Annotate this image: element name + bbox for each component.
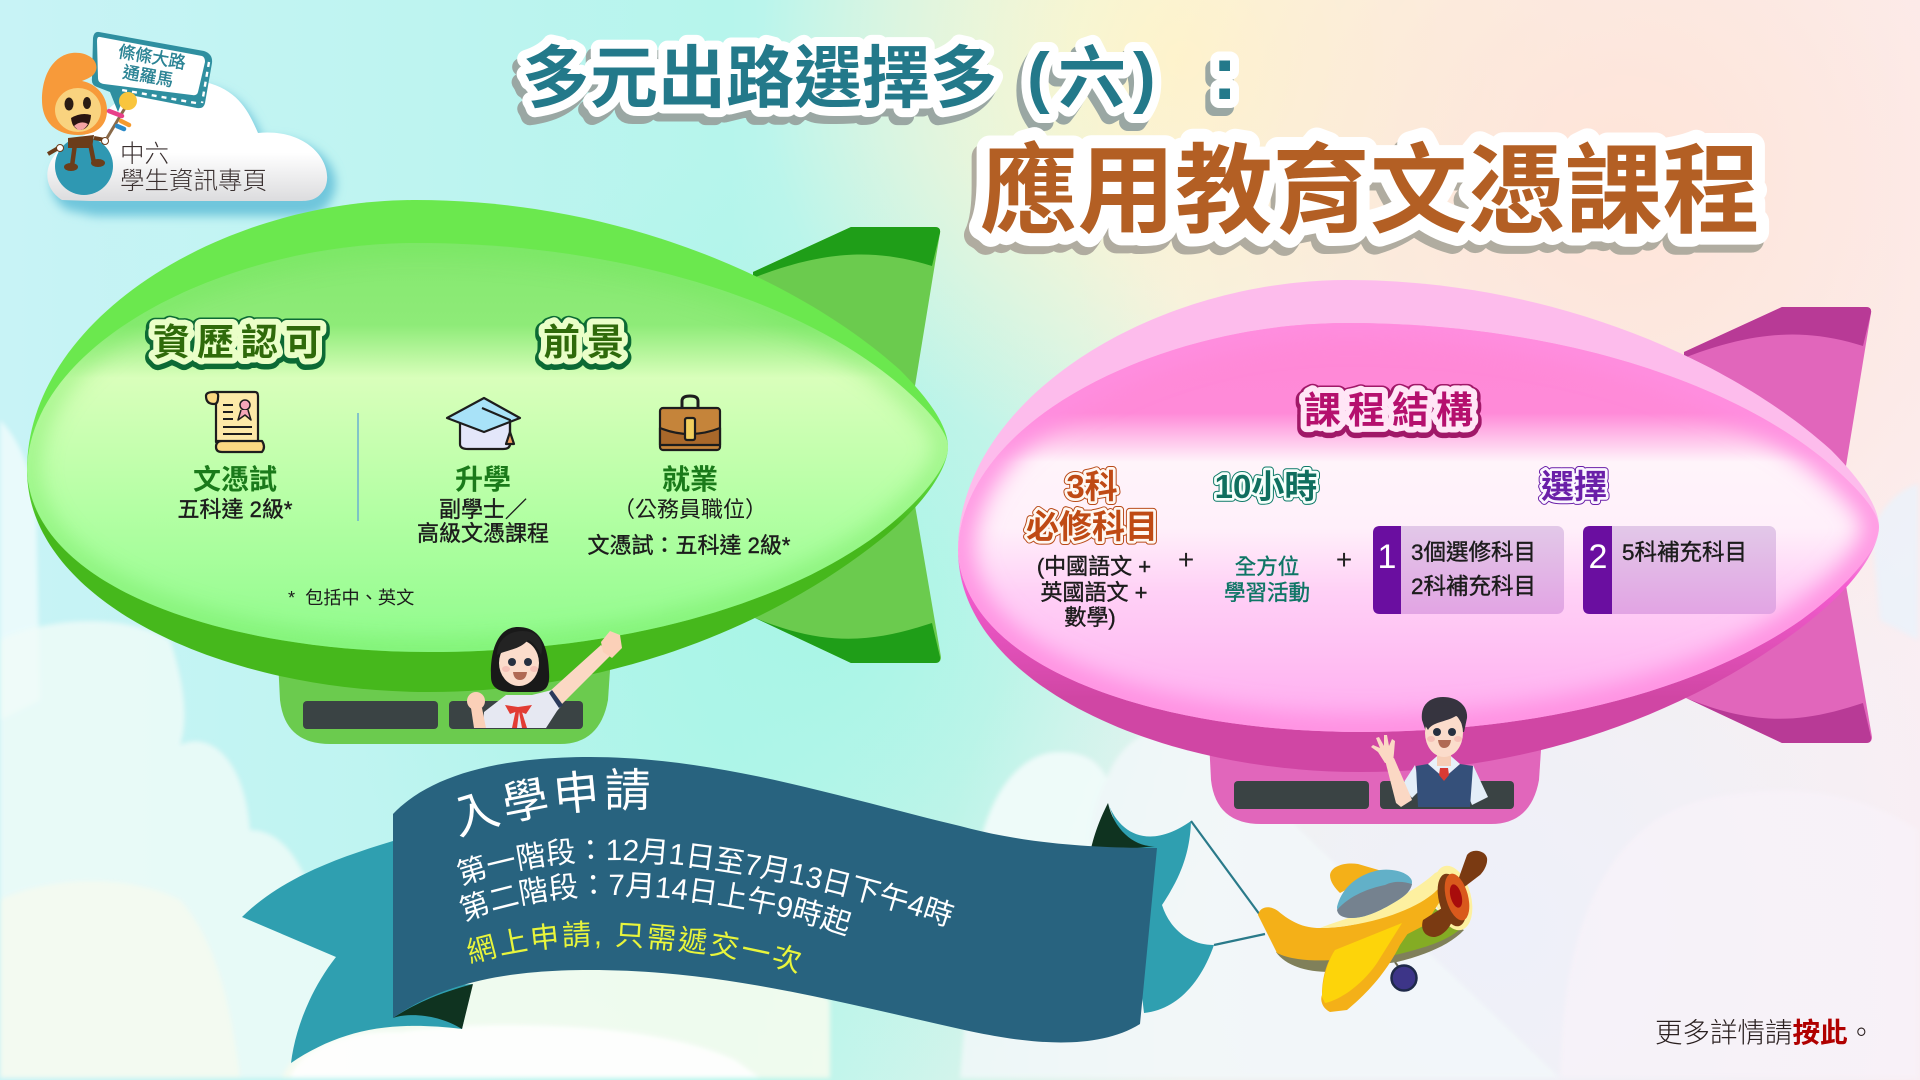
ribbon stage 2: 第二階段：7月14日上午9時起 xyxy=(459,872,852,936)
logo: student info page xyxy=(42,32,336,216)
title: line 1: ) xyxy=(1133,39,1156,115)
option box 1 xyxy=(1373,526,1564,614)
title: line 2: 應用教育文憑課程 xyxy=(975,145,1755,254)
title: line 1: 六 xyxy=(1058,41,1126,117)
speech bubble xyxy=(92,32,212,112)
ten hours activities: 10小時 xyxy=(1215,468,1317,505)
compulsory subjects: 3科 xyxy=(1066,468,1118,505)
plus sign 1: + xyxy=(1178,544,1194,575)
title: line 1: : xyxy=(1212,31,1237,116)
application ribbon xyxy=(242,757,1254,1063)
ribbon note: 網上申請, 只需遞交一次 xyxy=(467,920,802,974)
exam requirement xyxy=(178,464,293,522)
heading: qualification: 資歷認可 xyxy=(153,324,329,365)
ten hours activities xyxy=(1215,468,1317,605)
girl student xyxy=(467,627,622,728)
employment: 文憑試：五科達 2級* xyxy=(588,533,791,558)
compulsory subjects: 英國語文 + xyxy=(1041,580,1147,605)
title: line 1: 多元出路選擇多 xyxy=(522,41,998,117)
divider xyxy=(357,413,359,521)
ribbon heading: 入學申請 xyxy=(458,768,649,838)
exam requirement: 五科達 2級* xyxy=(178,497,293,522)
footnote: * 包括中、英文 xyxy=(288,588,414,608)
heading: qualification: 資歷認可 xyxy=(153,322,329,363)
title: line 1: 多元出路選擇多 xyxy=(522,41,998,117)
title: line 1: ) xyxy=(1133,39,1156,115)
icon: toy plane xyxy=(1258,851,1487,1012)
exam requirement: 文憑試 xyxy=(193,464,277,495)
ten hours activities: 學習活動 xyxy=(1224,581,1310,605)
pink envelope xyxy=(958,280,1879,772)
heading: prospects: 前景 xyxy=(543,322,631,363)
option box 2: 5科補充科目 xyxy=(1622,540,1747,565)
electives heading: 選擇 xyxy=(1541,468,1607,505)
further study: 高級文憑課程 xyxy=(417,521,549,546)
title: line 1: : xyxy=(1212,31,1237,116)
electives heading: 選擇 xyxy=(1541,468,1607,505)
plus sign 2: + xyxy=(1336,544,1352,575)
logo text: 中六 xyxy=(120,140,169,168)
title: line 1: 六 xyxy=(1058,41,1126,117)
employment: （公務員職位） xyxy=(613,497,767,522)
green airship xyxy=(27,200,948,744)
title: line 1 xyxy=(517,31,1237,125)
option box 2 xyxy=(1583,526,1776,614)
further study: 副學士／ xyxy=(439,497,527,522)
title: line 1: 多元出路選擇多 xyxy=(517,49,993,125)
title: line 1: ( xyxy=(1027,39,1050,115)
ribbon right tail xyxy=(1108,803,1214,1013)
heading: course structure: 課程結構 xyxy=(1304,390,1480,431)
option box 1: 2科補充科目 xyxy=(1411,574,1536,599)
compulsory subjects: 必修科目 xyxy=(1026,508,1158,545)
boy student xyxy=(1371,697,1488,807)
ten hours activities: 全方位 xyxy=(1235,555,1299,579)
icon: certificate scroll xyxy=(206,392,264,452)
logo cloud xyxy=(47,80,336,216)
pink fins xyxy=(1684,307,1872,743)
title: line 2: 應用教育文憑課程 xyxy=(980,137,1760,246)
ten hours activities: 10小時 xyxy=(1215,468,1317,505)
compulsory subjects: 必修科目 xyxy=(1026,508,1158,545)
further study xyxy=(417,464,549,546)
ribbon stage 1: 第一階段：12月1日至7月13日下午4時 xyxy=(456,838,954,926)
heading: prospects: 前景 xyxy=(543,322,631,363)
further study: 升學 xyxy=(455,464,511,495)
compulsory subjects: 數學) xyxy=(1064,605,1116,630)
green envelope xyxy=(27,200,948,692)
logo text: 學生資訊專頁 xyxy=(120,167,267,195)
title: line 1: 六 xyxy=(1053,49,1121,125)
pink airship xyxy=(958,280,1879,824)
compulsory subjects xyxy=(1026,468,1158,630)
title: line 2: 應用教育文憑課程 xyxy=(980,137,1760,246)
title: line 1: : xyxy=(1207,39,1232,124)
bubble text: 條條大路 xyxy=(117,42,187,73)
ten hours activities: 10小時 xyxy=(1215,468,1317,505)
heading: course structure: 課程結構 xyxy=(1304,390,1480,431)
icon: briefcase xyxy=(660,396,720,450)
option box 1: 1 xyxy=(1378,538,1396,576)
option box 1: 3個選修科目 xyxy=(1411,540,1536,565)
green gondola xyxy=(277,640,612,744)
green fins xyxy=(753,227,941,663)
arrow: tow ropes xyxy=(1191,821,1265,945)
icon: graduation cap xyxy=(447,398,520,449)
title: line 1: ( xyxy=(1022,47,1045,123)
ribbon left fold xyxy=(393,984,473,1029)
heading: qualification: 資歷認可 xyxy=(153,322,329,363)
compulsory subjects: 3科 xyxy=(1066,468,1118,505)
ribbon right fold xyxy=(1090,803,1156,853)
bubble text line 2: 通羅馬 xyxy=(121,63,175,90)
title: line 1: ( xyxy=(1027,39,1050,115)
mascot xyxy=(42,53,137,171)
compulsory subjects: 3科 xyxy=(1066,468,1118,505)
ribbon main band xyxy=(393,757,1157,1042)
logo globe xyxy=(55,137,113,195)
employment: 就業 xyxy=(662,464,718,495)
title: line 1: ) xyxy=(1128,47,1151,123)
employment xyxy=(588,464,791,558)
heading: course structure: 課程結構 xyxy=(1304,392,1480,433)
heading: prospects: 前景 xyxy=(543,324,631,365)
option box 2: 2 xyxy=(1589,538,1607,576)
pink gondola xyxy=(1208,720,1543,824)
ribbon left tail xyxy=(242,841,472,1063)
electives heading: 選擇 xyxy=(1541,468,1607,505)
compulsory subjects: 必修科目 xyxy=(1026,508,1158,545)
compulsory subjects: (中國語文 + xyxy=(1037,554,1151,579)
more details link: 更多詳情請按此。 xyxy=(1655,1017,1875,1048)
